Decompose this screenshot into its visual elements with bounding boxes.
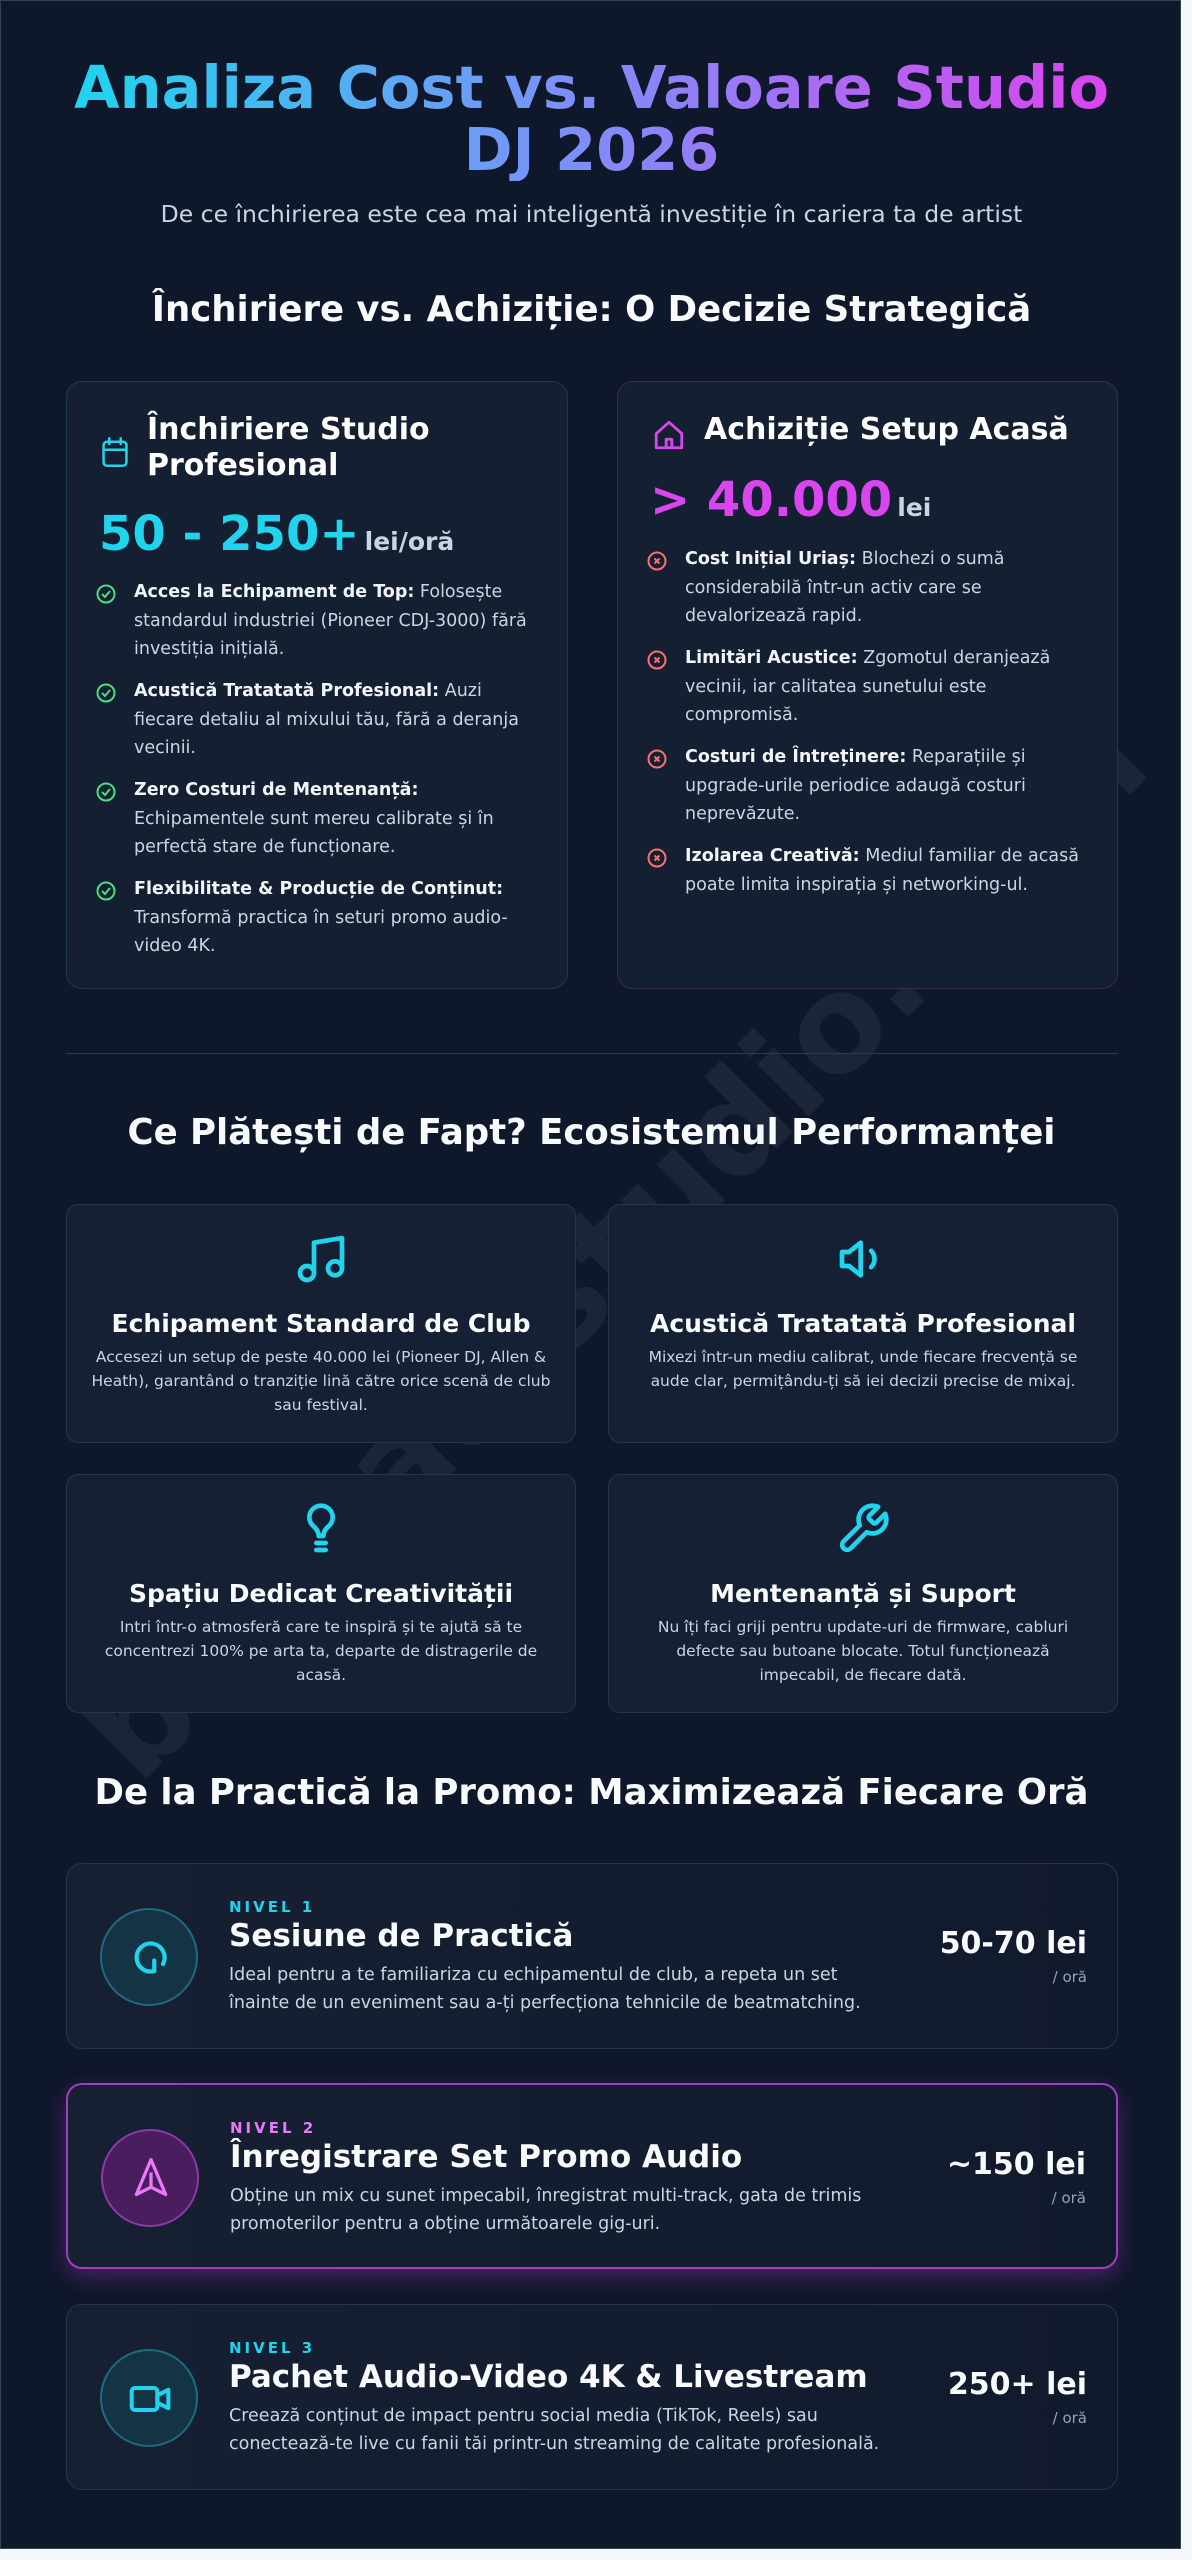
card heading	[147, 410, 430, 483]
feature: club equipment: Echipament Standard de Club	[112, 1309, 530, 1338]
watermark: bookadjstudio.com	[51, 683, 1177, 1809]
icon: send circle	[101, 2129, 199, 2227]
tier 2: / oră	[1052, 2189, 1086, 2207]
feature: maintenance	[608, 1474, 1118, 1713]
drawbacks list	[648, 549, 1079, 894]
drawback 1: Cost Inițial Uriaș: Blochezi o sumă considerabilă într-un activ care se devalorizează rapid.	[685, 549, 1005, 626]
feature: club equipment	[66, 1204, 576, 1443]
tier 2: Obține un mix cu sunet impecabil, înregistrat multi-track, gata de trimis promoterilor pentru a obține următoarele gig-uri.	[230, 2186, 861, 2234]
tier 3: Creează conținut de impact pentru social media (TikTok, Reels) sau conectează-te live cu fanii tăi printr-un streaming de calitate profesională.	[229, 2406, 879, 2454]
icon: music note	[298, 1236, 344, 1282]
price: > 40.000 lei	[650, 472, 931, 528]
card heading: Închiriere Studio	[147, 412, 430, 447]
tier 1	[66, 1863, 1118, 2049]
feature: creative space	[66, 1474, 576, 1713]
drawback 2: Limitări Acustice: Zgomotul deranjează vecinii, iar calitatea sunetului este compromisă.	[685, 648, 1050, 725]
feature: acoustics: Mixezi într-un mediu calibrat, unde fiecare frecvență se aude clar, permițându-ți să iei decizii precise de mixaj.	[649, 1348, 1077, 1390]
tier 2: NIVEL 2	[230, 2119, 316, 2137]
feature: creative space: Intri într-o atmosferă care te inspiră și te ajută să te concentrezi 100% pe arta ta, departe de distragerile de acasă.	[105, 1618, 537, 1684]
title: Analiza Cost vs. Valoare Studio	[74, 53, 1109, 122]
heading: ecosystem: Ce Plătești de Fapt? Ecosistemul Performanței	[128, 1112, 1055, 1153]
tier 1: 50-70 lei	[940, 1926, 1087, 1961]
icon: headphones circle	[100, 1908, 198, 2006]
card heading: Achiziție Setup Acasă	[704, 412, 1069, 447]
feature: acoustics: Acustică Tratatată Profesional	[650, 1309, 1076, 1338]
tier 2: Înregistrare Set Promo Audio	[230, 2139, 742, 2175]
price: 50 - 250+ lei/oră	[99, 506, 454, 562]
drawback 3: Costuri de Întreținere: Reparațiile și upgrade-urile periodice adaugă costuri neprevăzute.	[685, 747, 1026, 824]
drawback 4: Izolarea Creativă: Mediul familiar de acasă poate limita inspirația și networking-ul.	[685, 846, 1079, 894]
icon: wrench	[840, 1503, 889, 1552]
benefit 2: Acustică Tratatată Profesional: Auzi fiecare detaliu al mixului tău, fără a deranja vecinii.	[134, 681, 519, 758]
tier 3: / oră	[1053, 2409, 1087, 2427]
tier 3: Pachet Audio-Video 4K & Livestream	[229, 2359, 868, 2395]
icon: video camera circle	[100, 2349, 198, 2447]
panel: rent studio	[66, 381, 568, 989]
title: DJ 2026	[464, 115, 719, 184]
benefit 4: Flexibilitate & Producție de Conținut: Transformă practica în seturi promo audio-video 4K.	[134, 879, 508, 956]
benefit 1: Acces la Echipament de Top: Folosește standardul industriei (Pioneer CDJ-3000) fără investiția inițială.	[134, 582, 527, 659]
feature: acoustics	[608, 1204, 1118, 1443]
tier 1: / oră	[1053, 1968, 1087, 1986]
benefit 3: Zero Costuri de Mentenanță: Echipamentele sunt mereu calibrate și în perfectă stare de funcționare.	[134, 780, 494, 857]
icon: house	[654, 420, 684, 450]
tier 2	[66, 2083, 1118, 2269]
feature: maintenance: Nu îți faci griji pentru update-uri de firmware, cabluri defecte sau butoane blocate. Totul funcționează impecabil, de fiecare dată.	[658, 1618, 1068, 1684]
tier 3: 250+ lei	[948, 2367, 1087, 2402]
tier 2: ~150 lei	[947, 2147, 1086, 2182]
icon: lightbulb	[307, 1503, 335, 1552]
tier 1: NIVEL 1	[229, 1898, 315, 1916]
icon: calendar	[102, 437, 128, 467]
icon: speaker	[840, 1240, 877, 1278]
feature: creative space: Spațiu Dedicat Creativității	[129, 1579, 513, 1608]
title	[74, 53, 1109, 184]
feature: maintenance: Mentenanță și Suport	[710, 1579, 1016, 1608]
tier 1: Sesiune de Practică	[229, 1918, 573, 1954]
tier 3: NIVEL 3	[229, 2339, 315, 2357]
card heading: Profesional	[147, 448, 338, 483]
heading: rent vs buy: Închiriere vs. Achiziție: O Decizie Strategică	[152, 289, 1031, 330]
feature: club equipment: Accesezi un setup de peste 40.000 lei (Pioneer DJ, Allen & Heath), garantând o tranziție lină către orice scenă de club sau festival.	[92, 1348, 550, 1414]
subtitle: De ce închirierea este cea mai inteligentă investiție în cariera ta de artist	[161, 200, 1022, 228]
tier 1: Ideal pentru a te familiariza cu echipamentul de club, a repeta un set înainte de un eveniment sau a-ți perfecționa tehnicile de beatmatching.	[229, 1965, 861, 2013]
benefits list	[96, 582, 527, 956]
heading: practice to promo: De la Practică la Promo: Maximizează Fiecare Oră	[94, 1772, 1088, 1813]
tier 3	[66, 2304, 1118, 2490]
panel: buy home setup	[617, 381, 1118, 989]
